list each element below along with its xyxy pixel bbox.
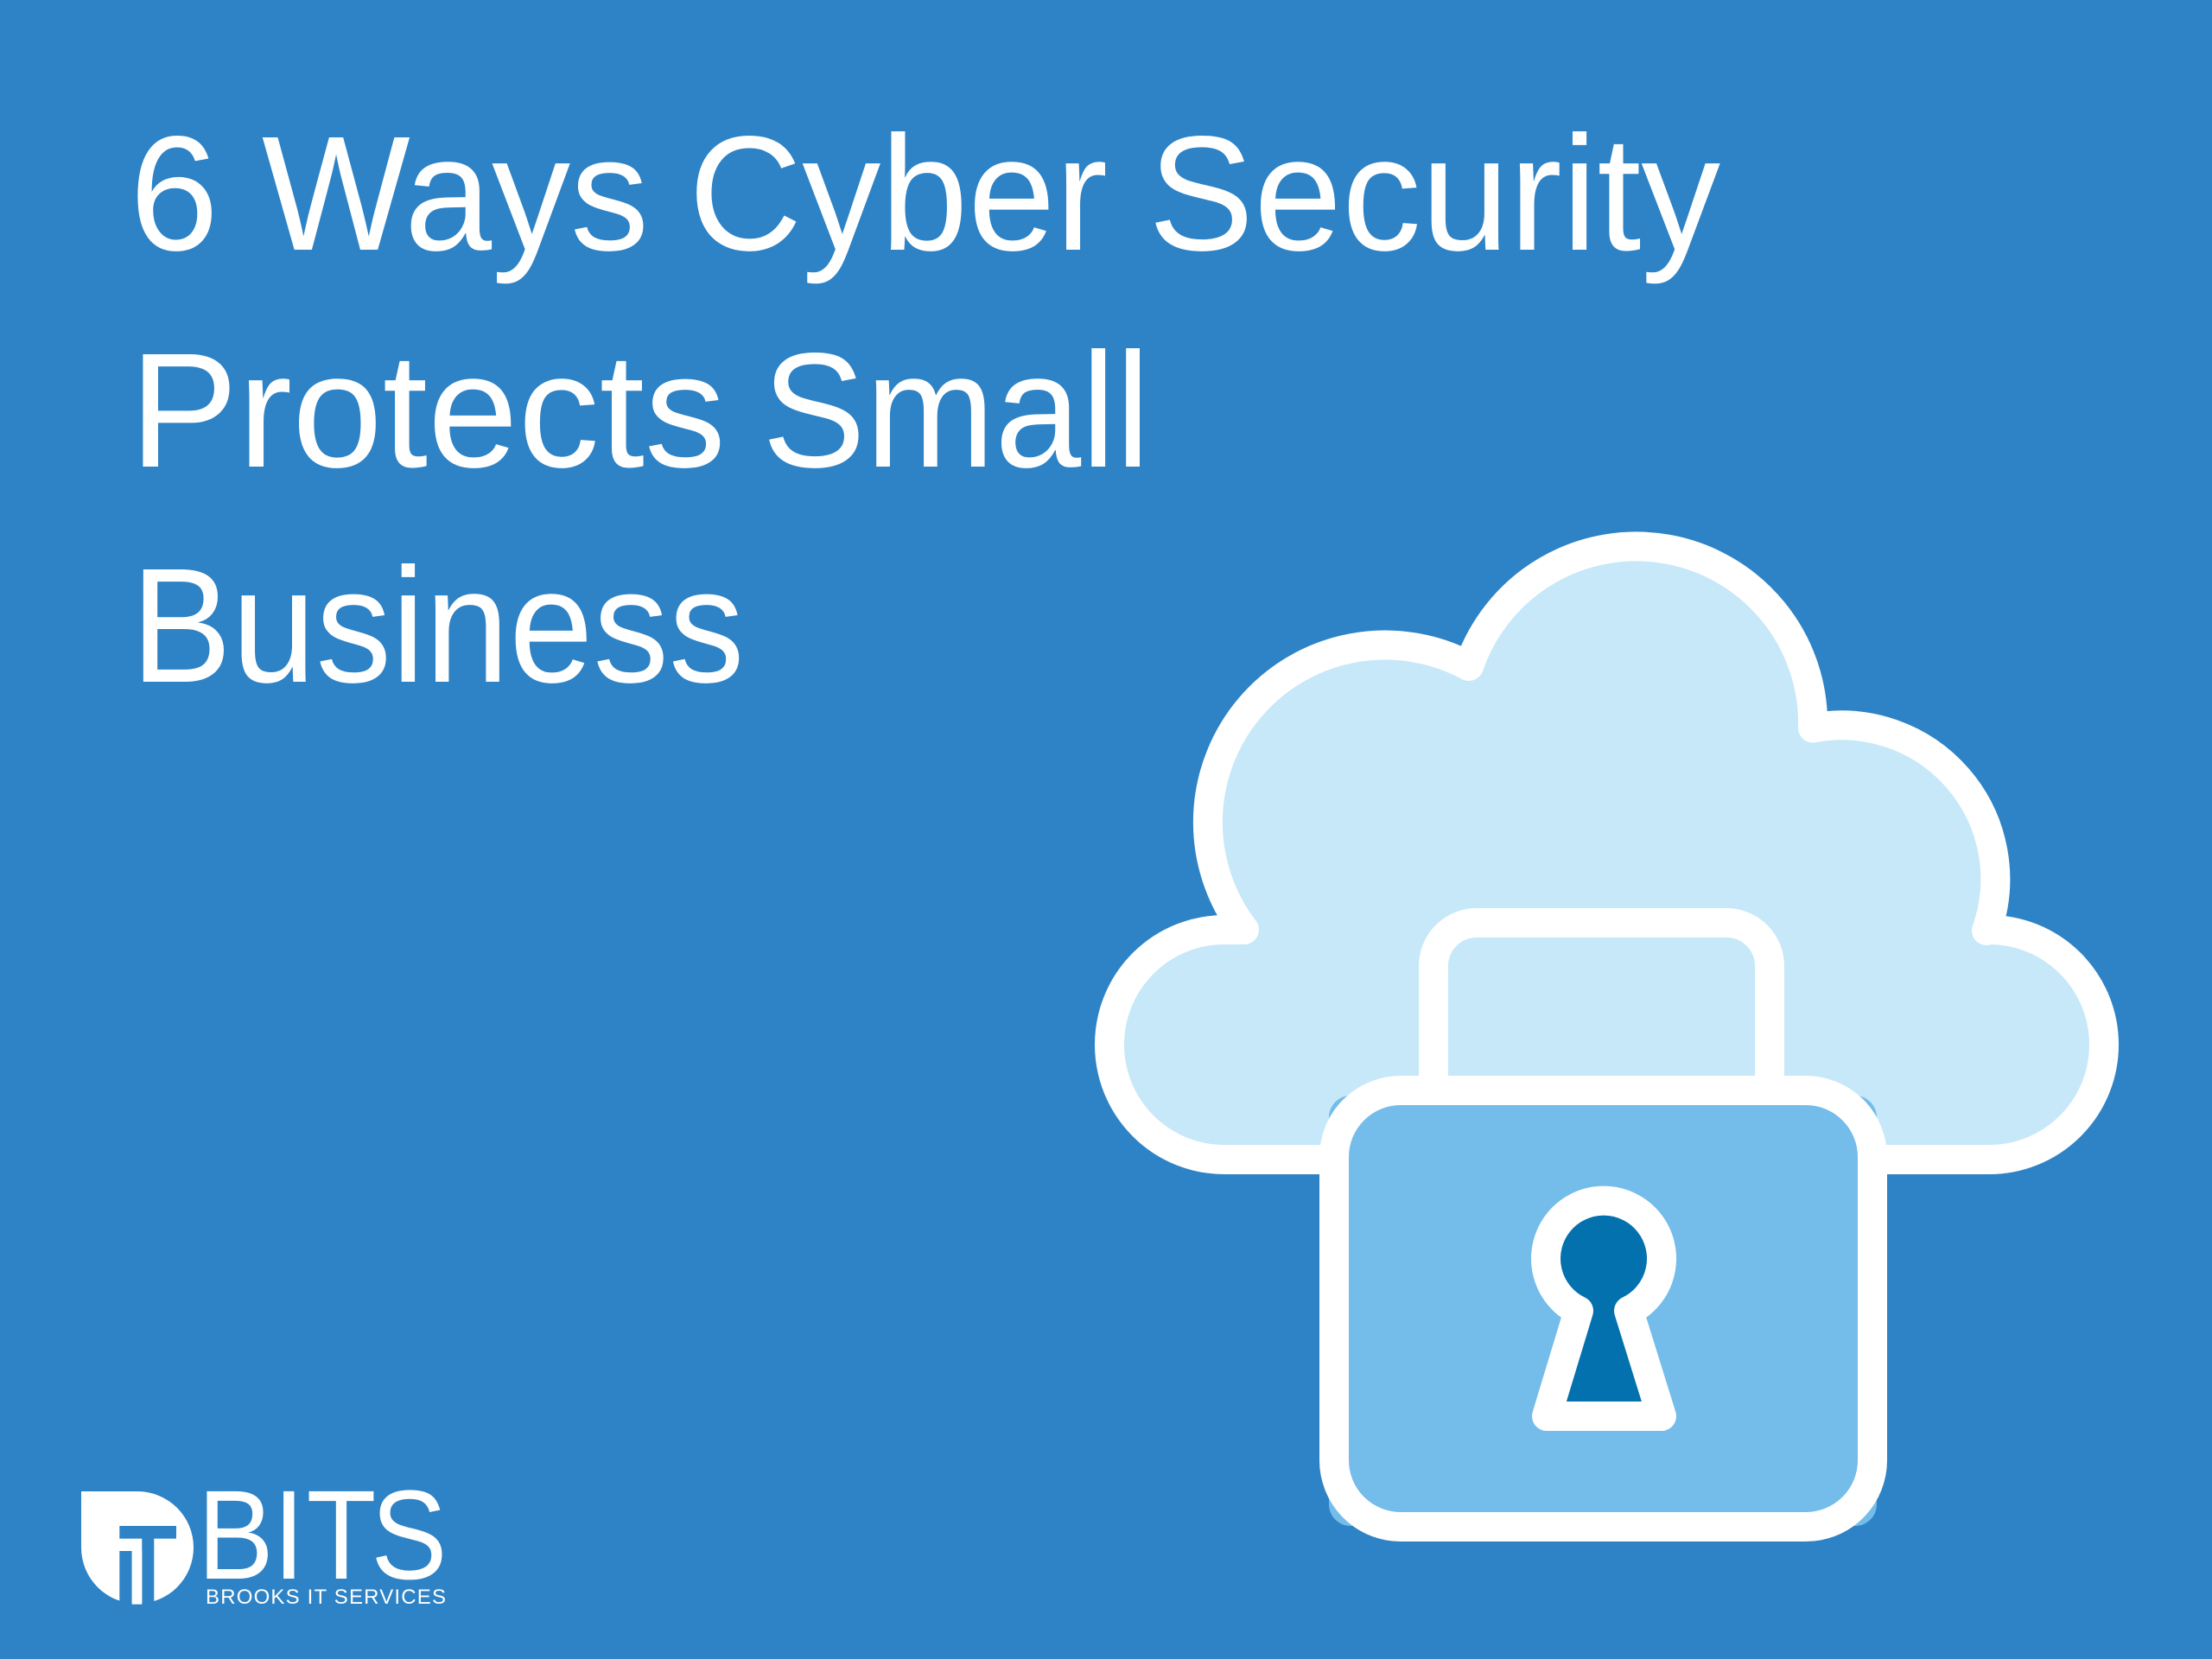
icon: cloud with padlock xyxy=(1109,546,2104,1527)
title line 1: Security xyxy=(1148,103,1720,285)
icon: keyhole xyxy=(1546,1201,1662,1416)
title line 2 xyxy=(130,320,1150,502)
icon: padlock body xyxy=(1334,1090,1872,1527)
title line 1 xyxy=(130,103,1720,285)
title xyxy=(130,103,1720,717)
title line 2: Small xyxy=(762,320,1150,502)
logo tagline: BROOKS IT SERVICES xyxy=(206,1586,446,1609)
logo mark xyxy=(81,1491,194,1607)
logo T cut-out stem xyxy=(142,1538,154,1607)
title line 2: Protects xyxy=(130,320,726,502)
icon: padlock offset shadow xyxy=(1329,1096,1877,1526)
icon: cloud xyxy=(1109,546,2104,1160)
logo white stem xyxy=(132,1551,142,1605)
logo: BITS Brooks IT Services xyxy=(81,1464,448,1609)
title line 1: Ways xyxy=(262,103,649,285)
title line 1: Cyber xyxy=(689,103,1108,285)
icon: padlock shackle xyxy=(1433,923,1770,1097)
title line 3: Business xyxy=(131,535,745,717)
title line 1: 6 xyxy=(130,103,219,285)
logo wordmark: BITS xyxy=(198,1464,448,1606)
logo i cut-out stem xyxy=(119,1551,132,1607)
logo mark shape xyxy=(81,1491,194,1604)
logo T cut-out bar xyxy=(119,1526,176,1539)
